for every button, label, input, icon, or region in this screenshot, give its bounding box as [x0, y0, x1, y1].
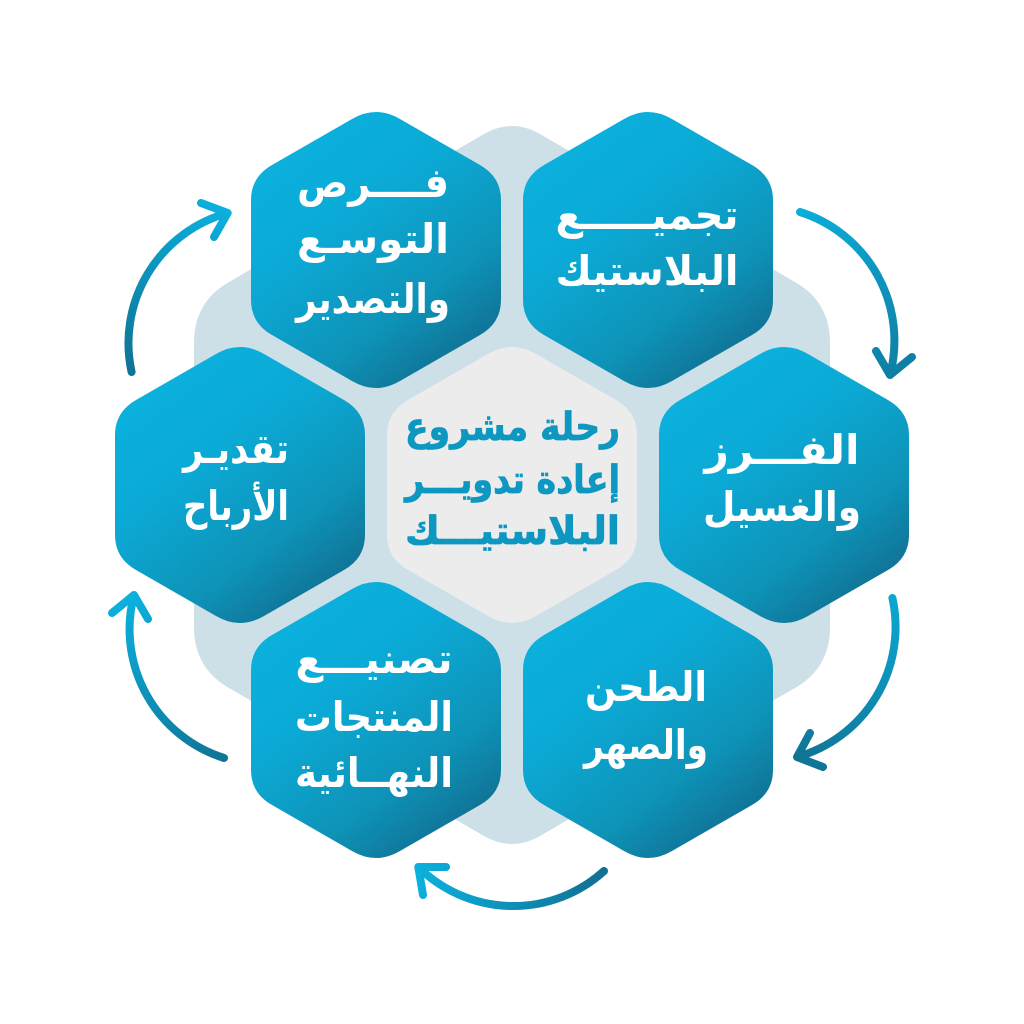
panel: step 6 expansion and export opportunities: التوسـع — [297, 215, 449, 263]
panel: step 4 manufacturing final products — [251, 582, 501, 858]
panel: step 6 expansion and export opportunities: فــــرص — [297, 159, 449, 207]
panel: step 4 manufacturing final products: النهــائية — [295, 749, 453, 797]
background large hexagon — [194, 126, 830, 844]
arrow: step 2 to step 3 — [797, 598, 896, 767]
heading: project title: البلاستيـــك — [405, 509, 620, 554]
arrow: step 3 to step 4 — [418, 867, 604, 906]
panel: step 5 profit estimation: الأرباح — [183, 480, 289, 530]
panel: step 5 profit estimation — [115, 347, 365, 623]
heading: project title: إعادة تدويـــر — [403, 458, 620, 503]
arrow: step 1 to step 2 — [800, 212, 912, 375]
panel: step 4 manufacturing final products: المنتجات — [295, 693, 453, 741]
panel: step 2 sorting and washing: الفـــرز — [702, 426, 860, 474]
heading: project title: رحلة مشروع — [405, 405, 620, 450]
panel: step 3 grinding and melting — [523, 582, 773, 858]
panel: center title hexagon — [387, 347, 637, 623]
arrow: step 4 to step 5 — [112, 595, 224, 758]
heading: project title — [403, 405, 620, 554]
panel: step 6 expansion and export opportunities — [251, 112, 501, 388]
panel: step 1 plastic collection: تجميـــــع — [556, 191, 738, 239]
panel: step 2 sorting and washing: والغسيل — [703, 483, 861, 532]
panel: step 3 grinding and melting: والصهر — [582, 721, 708, 770]
panel: step 1 plastic collection — [523, 112, 773, 388]
panel: step 1 plastic collection: البلاستيك — [556, 247, 738, 295]
panel: step 4 manufacturing final products: تصنيـــع — [296, 635, 452, 683]
arrow: step 5 to step 6 — [128, 203, 228, 372]
panel: step 2 sorting and washing — [659, 347, 909, 623]
panel: step 3 grinding and melting: الطحن — [585, 663, 707, 711]
panel: step 6 expansion and export opportunities: والتصدير — [294, 275, 450, 324]
panel: step 5 profit estimation: تقديـر — [181, 425, 289, 473]
